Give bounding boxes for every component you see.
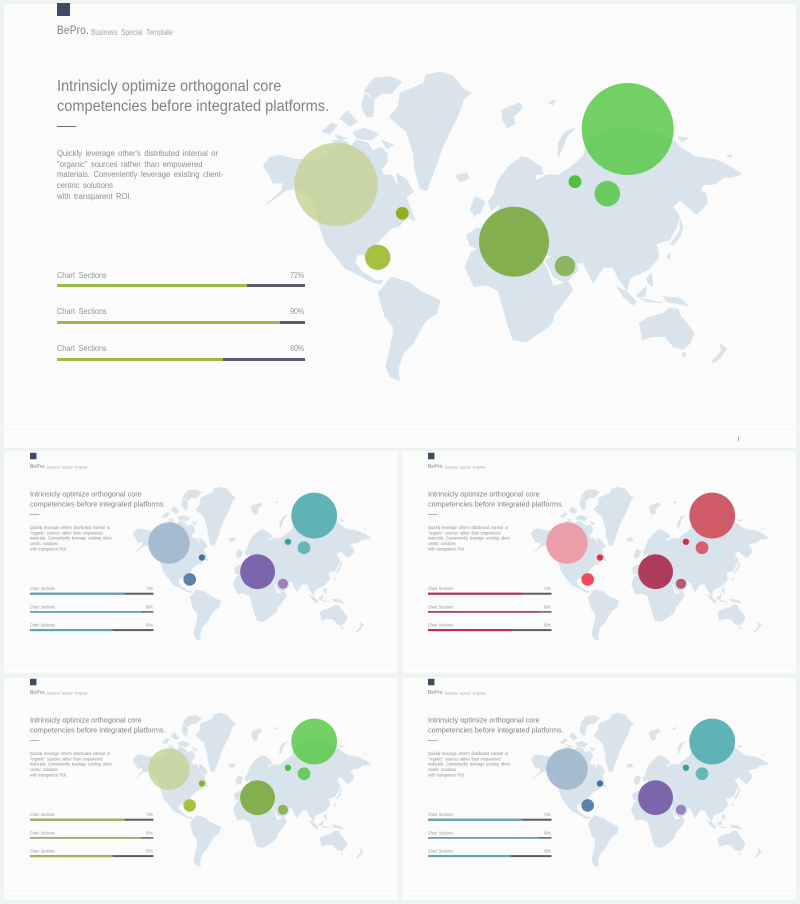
body text: "organic" sources rather than empowered — [57, 159, 202, 169]
panel: thumbnail blue-purple top left: 60% — [146, 623, 153, 628]
panel: thumbnail blue-purple top left: 72% — [146, 586, 153, 591]
panel: thumbnail red top right: with transparent ROI. — [428, 546, 465, 551]
panel: thumbnail green bottom left: Quickly leverage other's distributed internal or — [30, 751, 110, 756]
panel: thumbnail blue-purple bottom right: with transparent ROI. — [428, 772, 465, 777]
panel: thumbnail green bottom left: materials. Conveniently leverage existing client- — [30, 762, 113, 767]
panel: thumbnail red top right: materials. Conveniently leverage existing client- — [428, 536, 511, 541]
panel: thumbnail red top right: Quickly leverage other's distributed internal or — [428, 525, 508, 530]
body text — [57, 148, 223, 201]
brand line: Business Special Template — [90, 28, 172, 37]
panel: thumbnail blue-purple top left: Chart Sections — [30, 623, 55, 628]
brand line: BePro. — [57, 25, 89, 37]
panel: thumbnail red top right: competencies before integrated platforms. — [428, 500, 564, 508]
panel: thumbnail green bottom left: Intrinsicly optimize orthogonal core — [30, 716, 142, 725]
panel: thumbnail green bottom left: BePro. — [30, 690, 46, 696]
panel: thumbnail blue-purple bottom right: Quickly leverage other's distributed internal or — [428, 751, 508, 756]
panel: thumbnail green bottom left: Business Special Template — [47, 691, 87, 696]
title — [57, 78, 329, 114]
panel: thumbnail blue-purple bottom right: Chart Sections — [428, 849, 453, 854]
panel: thumbnail blue-purple top left: Business Special Template — [47, 465, 87, 470]
chart row 60%: Chart Sections — [57, 343, 107, 353]
panel: thumbnail green bottom left: 60% — [146, 849, 153, 854]
panel: thumbnail red top right: BePro. — [428, 464, 444, 470]
chart row 72% — [57, 270, 305, 287]
panel: thumbnail blue-purple top left: Intrinsicly optimize orthogonal core — [30, 490, 142, 499]
panel: thumbnail green bottom left: 90% — [146, 830, 153, 835]
panel: thumbnail blue-purple top left: Chart Sections — [30, 604, 55, 609]
body text: centric solutions — [57, 180, 113, 190]
panel: thumbnail blue-purple top left: with transparent ROI. — [30, 546, 67, 551]
panel: thumbnail blue-purple top left: materials. Conveniently leverage existing client- — [30, 536, 113, 541]
bubble: North America large — [294, 143, 378, 226]
panel: thumbnail blue-purple top left: Chart Sections — [30, 586, 55, 591]
panel: thumbnail red top right: Business Special Template — [445, 465, 485, 470]
panel: thumbnail red top right: "organic" sources rather than empowered — [428, 530, 500, 535]
panel: thumbnail red top right — [402, 451, 796, 673]
panel: thumbnail green bottom left — [4, 678, 398, 900]
title: Intrinsicly optimize orthogonal core — [57, 78, 281, 95]
panel: main slide, green — [4, 3, 796, 448]
panel: thumbnail blue-purple top left: 90% — [146, 604, 153, 609]
chart row 60% — [57, 343, 305, 361]
panel: thumbnail blue-purple bottom right: BePro. — [428, 690, 444, 696]
panel: thumbnail blue-purple top left: centric solutions — [30, 541, 58, 546]
panel: thumbnail blue-purple top left: competencies before integrated platforms. — [30, 500, 166, 508]
bubble: Gulf of Mexico — [365, 245, 390, 270]
chart row 60%: 60% — [290, 343, 304, 353]
brand line — [57, 25, 172, 37]
title: competencies before integrated platforms. — [57, 98, 329, 114]
panel: thumbnail blue-purple bottom right: competencies before integrated platforms. — [428, 726, 564, 734]
panel: thumbnail blue-purple bottom right: 60% — [544, 849, 551, 854]
panel: thumbnail blue-purple bottom right: materials. Conveniently leverage existing client- — [428, 762, 511, 767]
panel: thumbnail blue-purple top left: BePro. — [30, 464, 46, 470]
panel: thumbnail blue-purple bottom right: 72% — [544, 812, 551, 817]
panel: thumbnail green bottom left: Chart Sections — [30, 849, 55, 854]
panel: thumbnail green bottom left: centric solutions — [30, 767, 58, 772]
bubble: Mediterranean large — [479, 207, 549, 277]
bubble: Russia small — [569, 175, 581, 188]
bubble: Russia medium — [594, 181, 620, 206]
bubble: Canada east small — [396, 207, 409, 220]
panel: thumbnail blue-purple bottom right: centric solutions — [428, 767, 456, 772]
panel: thumbnail red top right: Chart Sections — [428, 623, 453, 628]
chart row 72%: Chart Sections — [57, 270, 107, 280]
panel: thumbnail blue-purple bottom right — [402, 678, 796, 900]
panel: thumbnail red top right: centric solutions — [428, 541, 456, 546]
panel: thumbnail red top right: 60% — [544, 623, 551, 628]
panel: thumbnail blue-purple bottom right: "organic" sources rather than empowered — [428, 756, 500, 761]
chart row 90%: 90% — [290, 306, 304, 316]
world map with bubbles — [263, 72, 742, 381]
panel: thumbnail red top right: 90% — [544, 604, 551, 609]
body text: with transparent ROI. — [57, 191, 132, 201]
body text: materials. Conveniently leverage existing client- — [57, 169, 223, 179]
panel: thumbnail blue-purple bottom right: Chart Sections — [428, 812, 453, 817]
bubble: Arabia small — [555, 256, 575, 276]
panel: thumbnail blue-purple top left — [4, 451, 398, 673]
panel: thumbnail green bottom left: competencies before integrated platforms. — [30, 726, 166, 734]
panel: thumbnail green bottom left: with transparent ROI. — [30, 772, 67, 777]
panel: thumbnail red top right: Chart Sections — [428, 604, 453, 609]
panel: thumbnail red top right: Chart Sections — [428, 586, 453, 591]
panel: thumbnail green bottom left: "organic" sources rather than empowered — [30, 756, 102, 761]
chart row 72%: 72% — [290, 270, 304, 280]
bubble: Siberia large — [582, 83, 674, 175]
panel: thumbnail blue-purple top left: Quickly leverage other's distributed internal or — [30, 525, 110, 530]
panel: thumbnail green bottom left: Chart Sections — [30, 812, 55, 817]
body text: Quickly leverage other's distributed internal or — [57, 148, 218, 158]
panel: thumbnail blue-purple top left: "organic" sources rather than empowered — [30, 530, 102, 535]
panel: thumbnail green bottom left: 72% — [146, 812, 153, 817]
panel: thumbnail red top right: 72% — [544, 586, 551, 591]
chart row 90% — [57, 306, 305, 324]
panel: thumbnail blue-purple bottom right: 90% — [544, 830, 551, 835]
panel: thumbnail green bottom left: Chart Sections — [30, 830, 55, 835]
panel: thumbnail blue-purple bottom right: Chart Sections — [428, 830, 453, 835]
panel: thumbnail blue-purple bottom right: Business Special Template — [445, 691, 485, 696]
chart row 90%: Chart Sections — [57, 306, 107, 316]
panel: thumbnail blue-purple bottom right: Intrinsicly optimize orthogonal core — [428, 716, 540, 725]
panel: thumbnail red top right: Intrinsicly optimize orthogonal core — [428, 490, 540, 499]
